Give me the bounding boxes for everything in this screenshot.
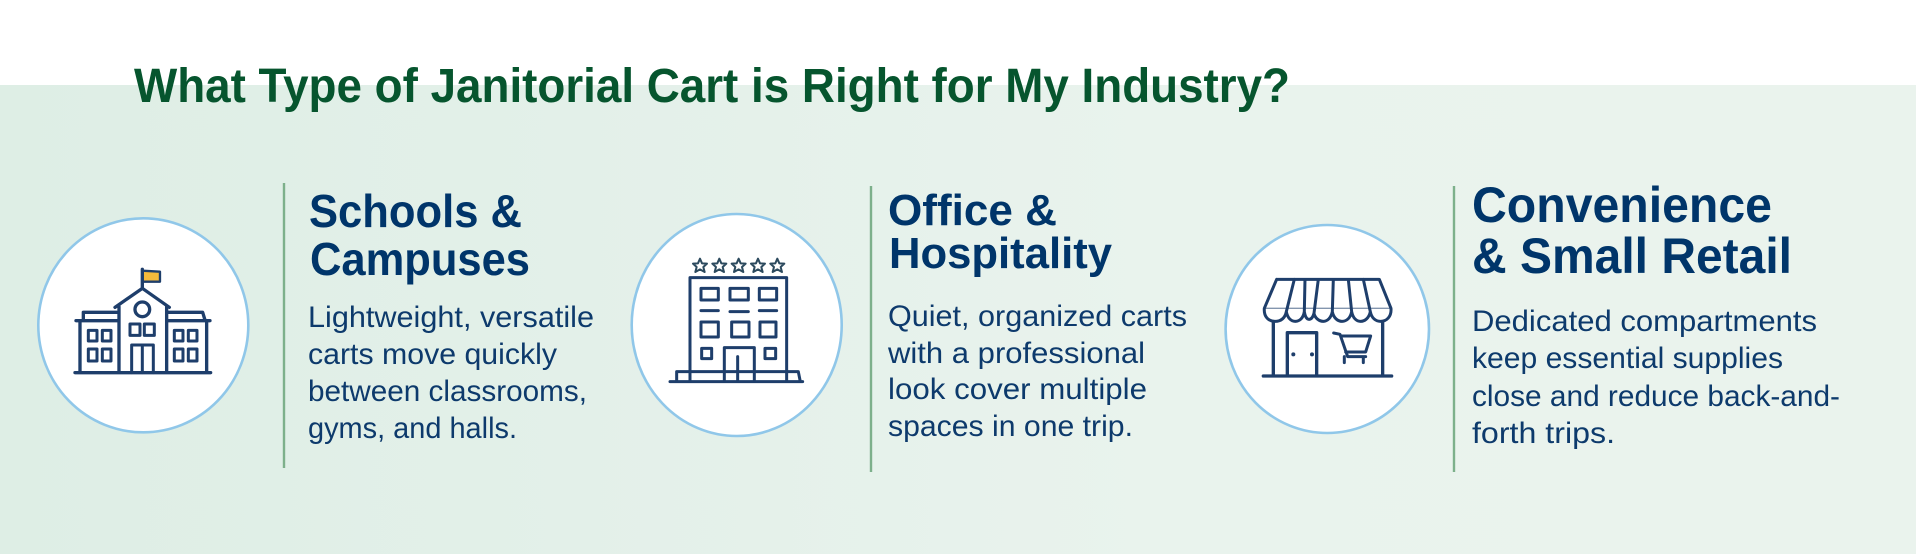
body text: schools: Lightweight, versatile bbox=[308, 301, 594, 334]
body text: schools: gyms, and halls. bbox=[308, 412, 517, 445]
body text: office: spaces in one trip. bbox=[888, 410, 1133, 443]
body text: retail: forth trips. bbox=[1472, 417, 1615, 450]
body text: retail bbox=[1472, 305, 1840, 450]
heading: schools and campuses: Schools & bbox=[309, 185, 522, 237]
body text: office: look cover multiple bbox=[888, 373, 1147, 406]
divider bbox=[283, 183, 285, 468]
icon: storefront in circle bbox=[1226, 225, 1429, 433]
body text: retail: keep essential supplies bbox=[1472, 342, 1783, 375]
body text: schools: carts move quickly bbox=[308, 338, 557, 371]
panel: office and hospitality bbox=[632, 186, 1187, 472]
body text: office: Quiet, organized carts bbox=[888, 300, 1187, 333]
body text: retail: close and reduce back-and- bbox=[1472, 380, 1840, 413]
heading: office and hospitality bbox=[888, 186, 1113, 278]
heading: office and hospitality: Hospitality bbox=[889, 229, 1113, 278]
heading: convenience and small retail: & Small Retail bbox=[1472, 228, 1792, 284]
panel: schools and campuses bbox=[38, 183, 594, 468]
body text: retail: Dedicated compartments bbox=[1472, 305, 1817, 338]
heading: convenience and small retail: Convenience bbox=[1472, 177, 1772, 233]
heading: schools and campuses: Campuses bbox=[310, 233, 530, 285]
body text: office: with a professional bbox=[887, 337, 1145, 370]
body text: schools: between classrooms, bbox=[308, 375, 587, 408]
title: What Type of Janitorial Cart is Right for My Industry? bbox=[134, 60, 1290, 113]
icon: hotel building in circle bbox=[632, 214, 842, 436]
body text: office bbox=[887, 300, 1187, 443]
icon: school building in circle bbox=[38, 218, 248, 432]
heading: schools and campuses bbox=[309, 185, 530, 285]
heading: convenience and small retail bbox=[1472, 177, 1792, 284]
body text: schools bbox=[308, 301, 594, 445]
divider bbox=[870, 186, 872, 472]
panel: convenience and small retail bbox=[1226, 177, 1840, 472]
heading: office and hospitality: Office & bbox=[888, 186, 1057, 235]
divider bbox=[1453, 186, 1455, 472]
